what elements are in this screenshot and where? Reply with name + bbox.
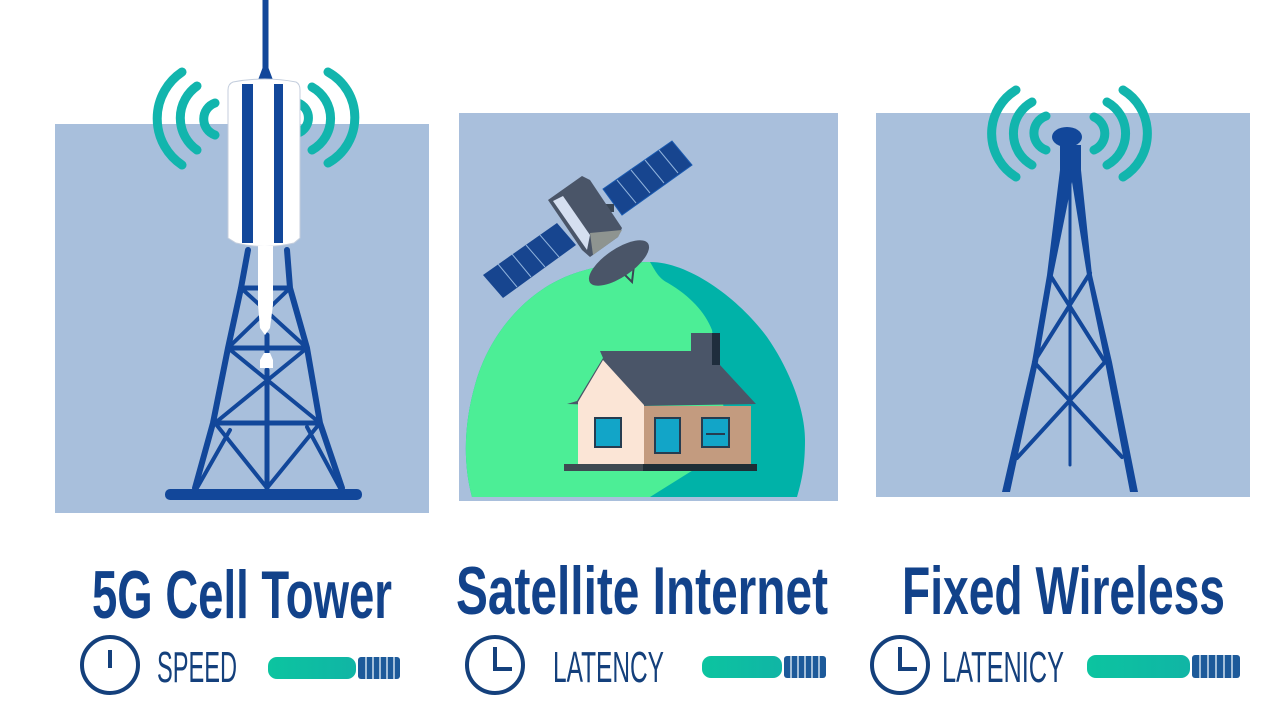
metric: satellite latency <box>467 637 826 693</box>
title: Satellite Internet: Satellite Internet <box>456 553 828 629</box>
icon: signal waves <box>992 90 1147 177</box>
panel: fixed wireless <box>876 90 1250 497</box>
metric: speed <box>82 637 400 693</box>
icon: right signal waves <box>298 72 355 163</box>
radio unit <box>228 79 300 246</box>
house <box>564 333 757 471</box>
metric: fixed wireless latency <box>872 637 1240 693</box>
antenna mast <box>258 0 273 80</box>
metric: fixed wireless latency: LATENICY <box>942 643 1064 692</box>
title: 5G Cell Tower: 5G Cell Tower <box>92 557 392 633</box>
metric: speed: SPEED <box>157 643 237 692</box>
white column <box>258 246 273 368</box>
coverage dome <box>466 262 805 497</box>
icon: left signal waves <box>157 72 215 165</box>
tower base <box>165 489 362 500</box>
tower <box>1002 127 1138 492</box>
tower lattice <box>195 250 342 488</box>
satellite <box>483 141 692 298</box>
metric: satellite latency: LATENCY <box>553 643 664 692</box>
panel: 5G cell tower <box>55 0 429 513</box>
panel: satellite internet <box>459 113 838 501</box>
